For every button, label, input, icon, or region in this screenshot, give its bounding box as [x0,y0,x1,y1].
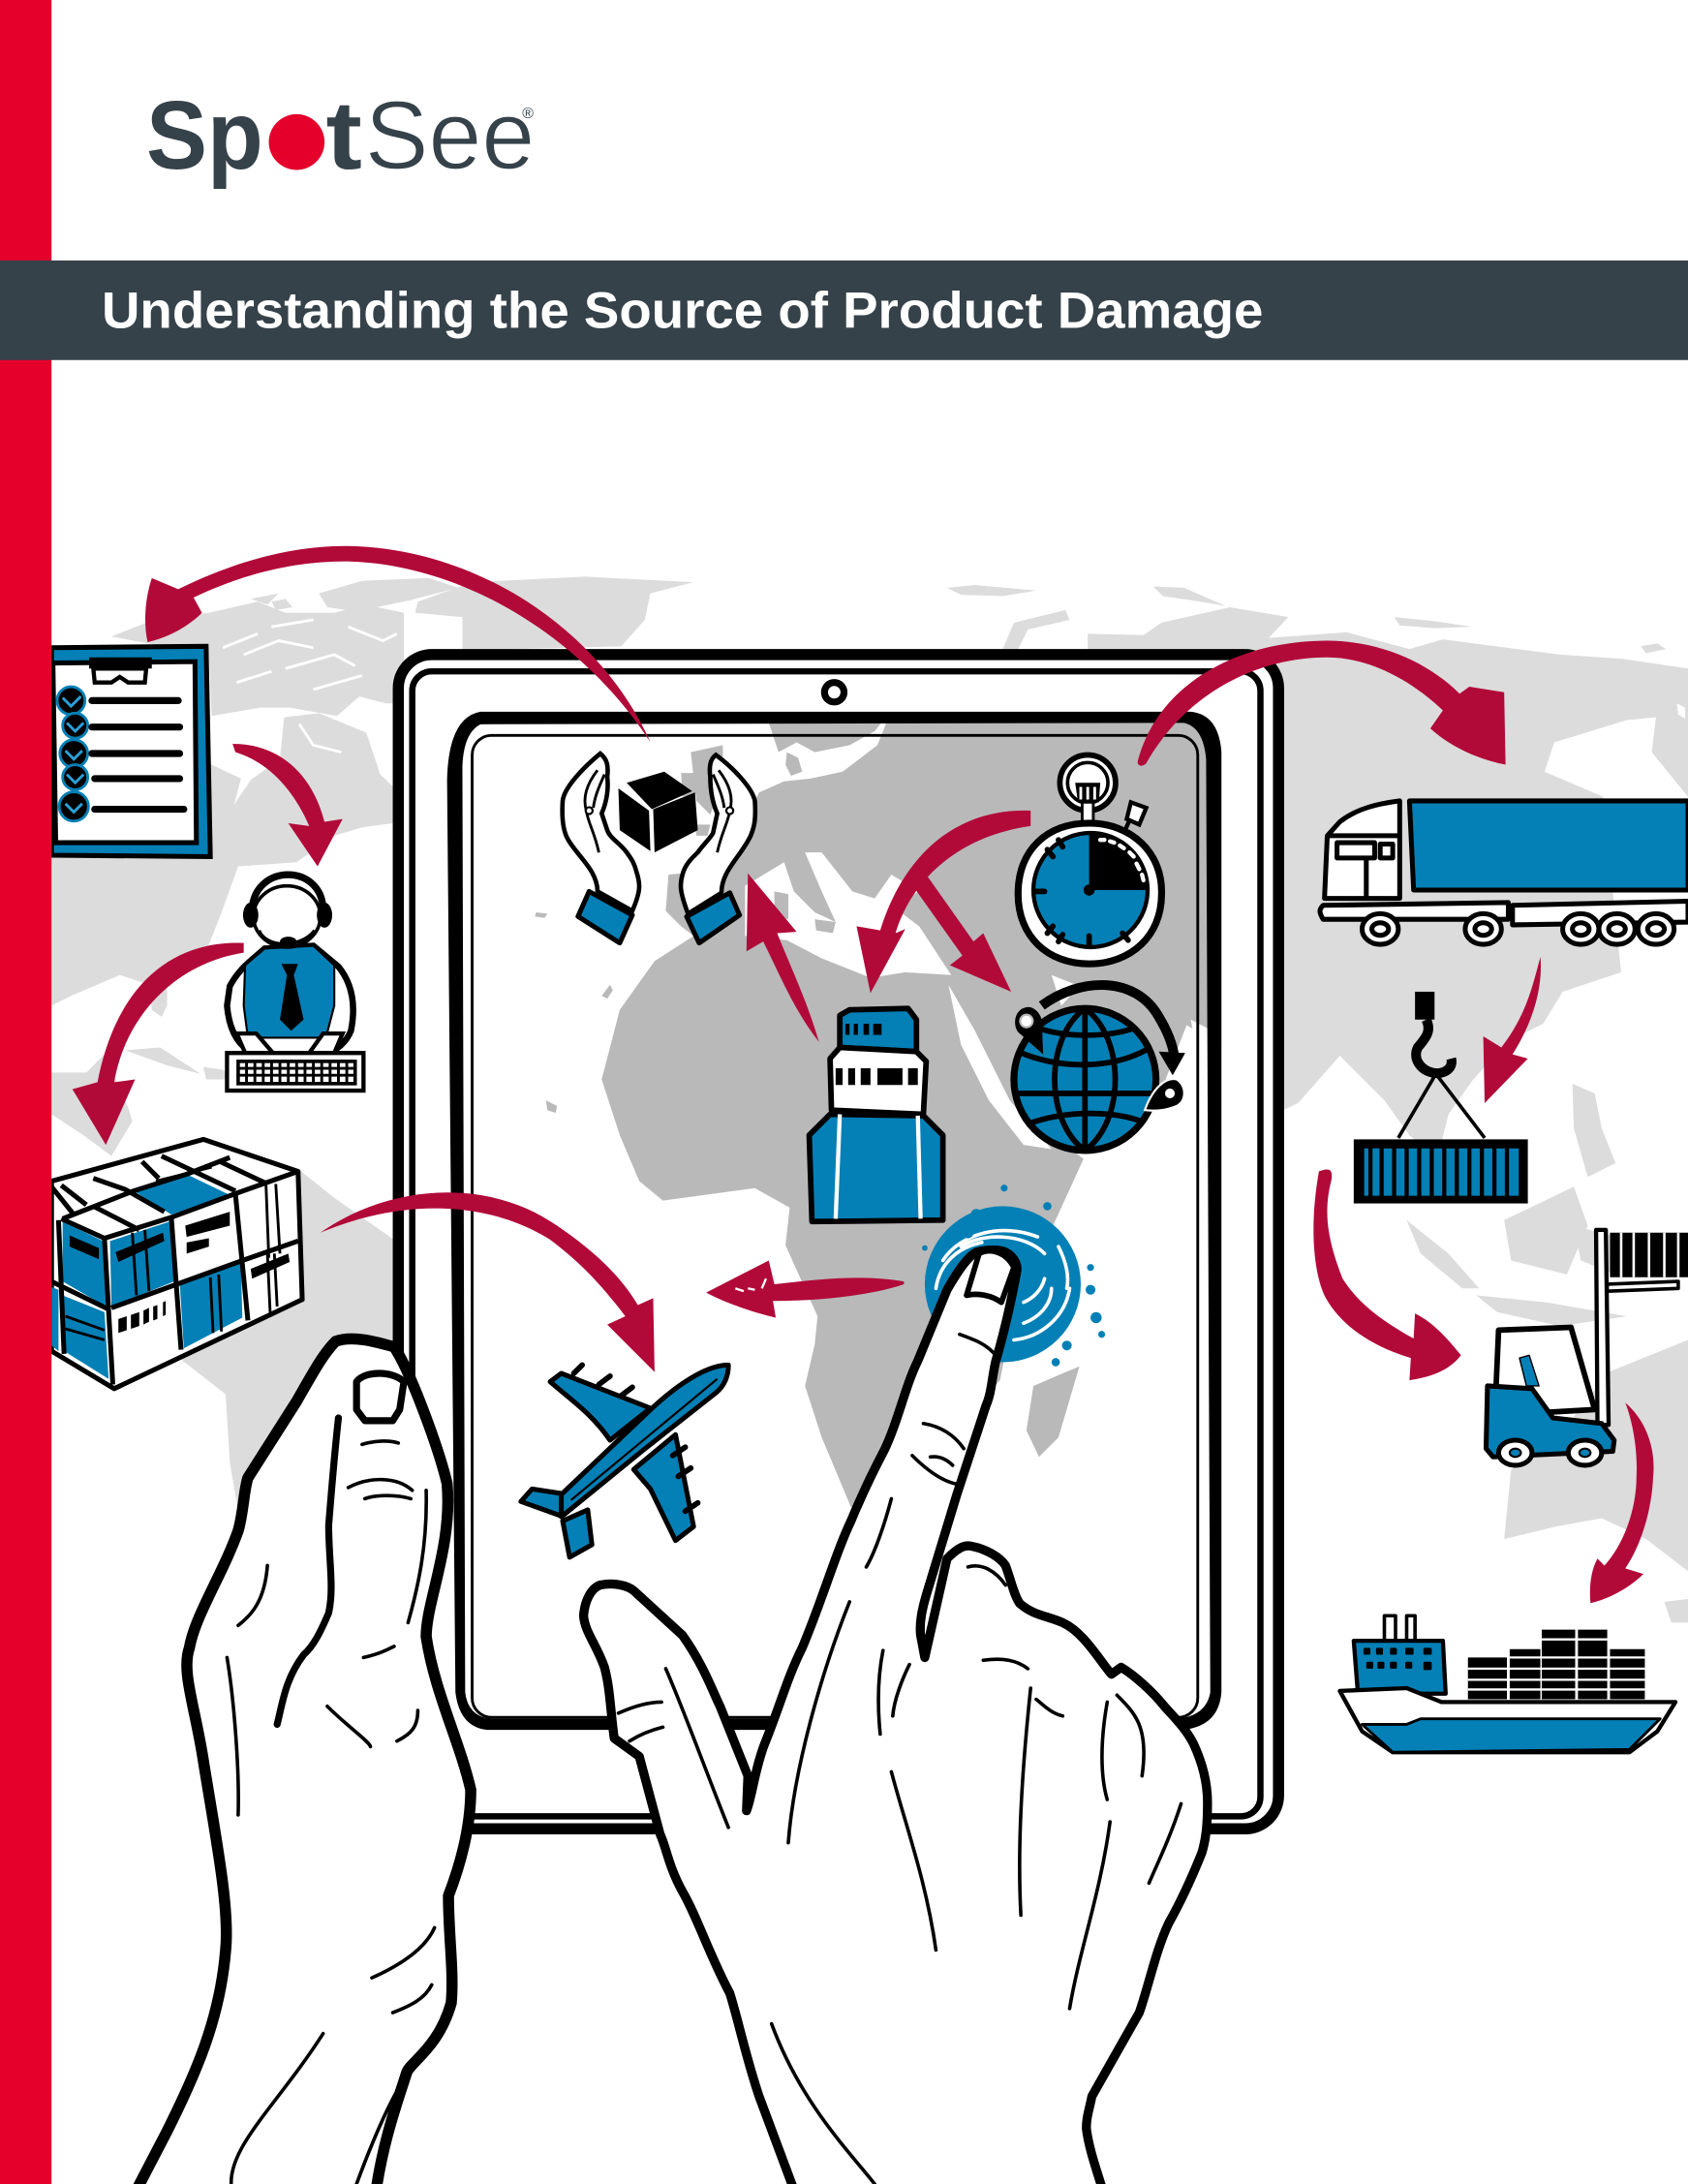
icon: stopwatch [1018,754,1161,964]
logo: SpotSee: Sp [146,81,263,190]
arrow: forklift to ship [1590,1402,1654,1603]
title: Understanding the Source of Product Damage [102,283,1263,340]
arrow: stopwatch to truck [1138,641,1506,766]
icon: hands holding a box [563,754,755,943]
tablet body [398,655,1278,1829]
white inlets in the light map [223,620,397,753]
icon: customer service agent [227,875,363,1091]
touch ripple [922,1184,1105,1367]
arrow: agent to parcels [73,942,244,1145]
icon: cargo plane [521,1365,728,1557]
arrow: screen tap to plane [706,1261,904,1317]
icon: container on crane hook [1354,992,1528,1204]
arrow: parcels to plane [321,1192,655,1372]
tablet [398,655,1278,1829]
fingernail [967,1251,1014,1303]
icon: inspection clipboard [51,646,210,856]
icon: stacked packages [810,1008,943,1221]
icon: container ship [1339,1615,1675,1752]
screen border [447,712,1221,1730]
tablet inner edge [413,671,1260,1816]
thumbnail [356,1373,404,1421]
logo: SpotSee [146,81,535,190]
title band [0,261,1688,360]
background world map, light grey [51,576,1688,1622]
keyboard [227,1053,363,1091]
arrow: lorry to container [1484,957,1541,1103]
left hand [131,1338,471,2184]
arrow: clipboard to agent [232,744,343,867]
screen inner hairline [473,735,1198,1717]
logo: SpotSee: See [365,81,535,190]
arrow: stopwatch to globe [911,871,1011,992]
red side bar [0,0,51,2184]
arrow: container to forklift [1313,1170,1461,1380]
icon: forklift [1486,1230,1688,1465]
camera [824,683,844,702]
logo dot [269,114,324,169]
arrow: stopwatch to packages [856,811,1030,993]
screen map, dark grey [535,712,1221,1507]
left hand [563,754,639,943]
box [619,772,697,852]
arrow: tablet box to clipboard [145,546,651,743]
logo: SpotSee: ® [522,106,534,122]
logo: SpotSee: t [326,81,362,190]
arrow: packages to hands [747,874,819,1042]
right hand [584,1250,1208,2184]
icon: globe with route [1014,985,1185,1151]
right hand [681,754,755,943]
icon: lorry [1320,801,1688,944]
icon: pile of parcels [51,1139,302,1389]
